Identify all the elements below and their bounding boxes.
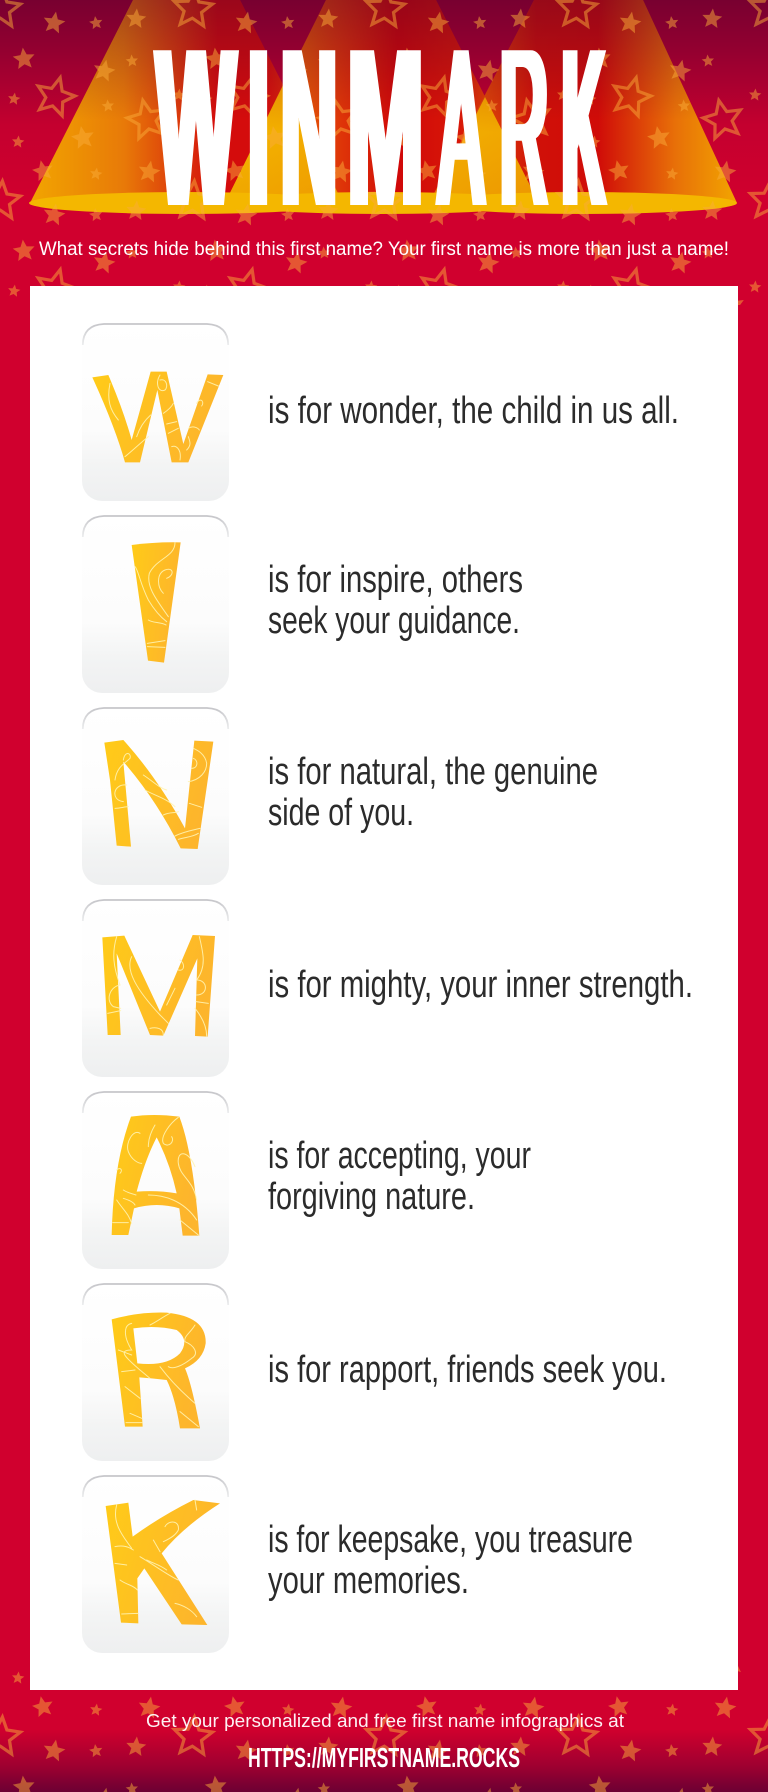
text: I: is for inspire, others xyxy=(268,559,523,601)
row: N xyxy=(82,707,609,885)
title: M xyxy=(347,2,424,253)
row: M xyxy=(82,899,693,1077)
card: I xyxy=(82,515,229,693)
row: K xyxy=(82,1475,644,1653)
row: I xyxy=(82,515,534,693)
text: N: side of you. xyxy=(268,792,414,834)
spotlight: left xyxy=(30,0,343,203)
spotlight floor pools xyxy=(29,192,737,214)
subtitle: What secrets hide behind this first name? Your first name is more than just a name! xyxy=(39,239,729,260)
title: R xyxy=(500,3,548,254)
title xyxy=(156,1,605,254)
card: K xyxy=(82,1475,229,1653)
icon: letter A xyxy=(112,1115,199,1236)
icon: letter M xyxy=(102,935,215,1037)
title: K xyxy=(562,1,605,253)
text: I: seek your guidance. xyxy=(268,600,520,642)
spotlight overlaps xyxy=(225,85,539,203)
text: A: is for accepting, your xyxy=(268,1135,531,1177)
title: N xyxy=(280,1,338,253)
card: A xyxy=(82,1091,229,1269)
title: A xyxy=(439,3,483,254)
card: N xyxy=(82,707,229,885)
spotlights xyxy=(29,0,737,214)
row: A xyxy=(82,1091,542,1269)
card: M xyxy=(82,899,229,1077)
text: A: forgiving nature. xyxy=(268,1176,475,1218)
card: W xyxy=(82,323,229,501)
text: K: is for keepsake, you treasure xyxy=(268,1519,633,1561)
title: W xyxy=(156,3,236,254)
panel: letters xyxy=(30,286,738,1690)
card: R xyxy=(82,1283,229,1461)
title: I xyxy=(248,2,269,253)
footer link: HTTPS://MYFIRSTNAME.ROCKS xyxy=(248,1742,520,1773)
icon: letter R xyxy=(112,1313,206,1428)
footer text: Get your personalized and free first name infographics at xyxy=(146,1711,624,1731)
row: R xyxy=(82,1283,667,1461)
text: K: your memories. xyxy=(268,1560,469,1602)
icon: letter I xyxy=(132,542,181,663)
icon: letter N xyxy=(104,740,213,849)
spotlight: right xyxy=(429,0,737,203)
icon: letter K xyxy=(106,1500,220,1625)
panel background xyxy=(30,286,738,1690)
text: N: is for natural, the genuine xyxy=(268,751,598,793)
row: W xyxy=(82,323,679,501)
spotlight: centre xyxy=(225,0,539,203)
icon: letter W xyxy=(92,372,223,462)
